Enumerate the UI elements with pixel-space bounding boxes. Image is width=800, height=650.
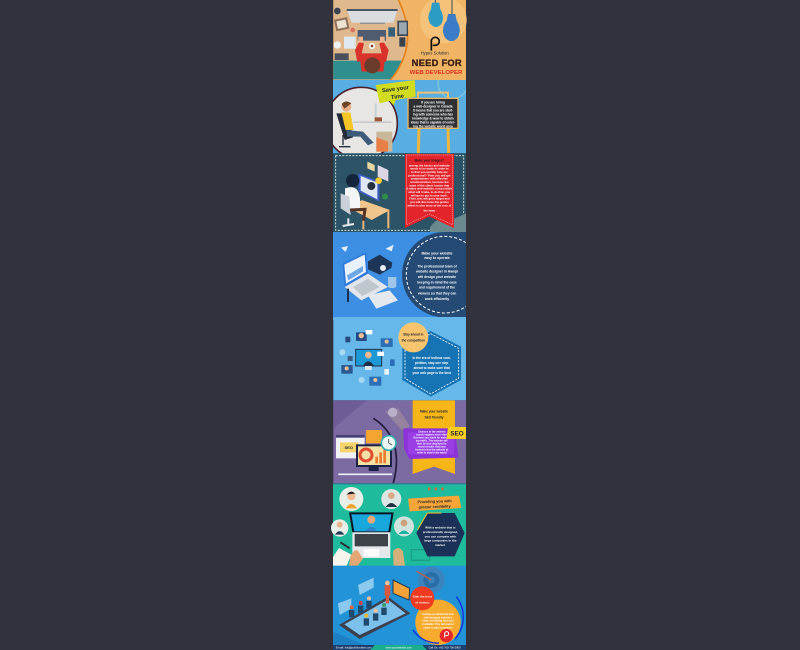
purple text panel <box>403 428 459 459</box>
callout: save your time: Save your <box>382 85 410 94</box>
footer bar: www.yourwebsite.com <box>386 646 413 650</box>
purple text panel: search engines more often <box>416 433 448 436</box>
circle text block: easier to gain customers <box>423 626 453 629</box>
circle text block: website designer in Hampi <box>415 270 458 274</box>
ribbon: you will also have the genius <box>410 200 449 204</box>
icon: target <box>416 567 445 593</box>
illustration: laptop with hands <box>333 512 405 566</box>
callout: save your time <box>376 80 416 105</box>
hexagon text block: market. <box>435 543 446 547</box>
yellow ribbon: Make your website <box>420 409 448 413</box>
purple text panel: then be also displayed in <box>417 442 447 445</box>
illustration: easel with blackboard: it means that you are start- <box>413 109 453 113</box>
banner: providing you: greater credibility <box>419 504 452 510</box>
panel: stay ahead in the competition <box>333 317 466 400</box>
circle text block: work efficiently <box>424 297 449 301</box>
circle text block: will design your website <box>417 275 456 279</box>
icon: rocket <box>385 408 410 430</box>
purple text panel: order to stay in the world <box>417 451 447 454</box>
icon: desk items <box>334 8 408 60</box>
circle text block: The professional team of <box>417 264 458 268</box>
purple text panel: ing traffic. The website will <box>416 439 448 442</box>
panel: save your time <box>333 80 466 155</box>
circle text block: Having a professional and <box>423 613 454 616</box>
ribbon: needs to be made in order to <box>410 167 449 171</box>
ribbon <box>405 154 454 228</box>
ribbon: the team <box>424 208 436 212</box>
illustration: easel with blackboard <box>408 93 458 153</box>
icon: network of computers <box>339 330 395 386</box>
callout: save your time: Time <box>391 94 404 101</box>
hexagon text block: large companies in the <box>424 539 457 543</box>
illustration: person at desk <box>333 86 398 154</box>
ribbon: communication, because the <box>410 180 449 184</box>
hexagon text block <box>402 331 461 397</box>
circle text block <box>402 232 466 317</box>
hexagon text block: ahead to make sure that <box>414 366 451 370</box>
icon: keyboard <box>358 30 386 41</box>
illustration: person at isometric desk <box>341 162 390 229</box>
icon: blue lamps <box>428 0 460 41</box>
illustration: SEO screens: SEO <box>344 445 353 450</box>
icon: monitor <box>347 9 398 24</box>
illustration: isometric laptop <box>341 245 398 309</box>
decoration: top icons <box>428 485 444 493</box>
circle text block: easy to operate <box>424 256 450 260</box>
ribbon: will get to put to your work. <box>410 193 448 197</box>
circle text block: keeping in mind the ease <box>417 280 457 284</box>
icon: red logo circle <box>440 629 453 642</box>
illustration: easel with blackboard: a web-designer in Canada <box>414 105 453 109</box>
hexagon text block <box>416 513 465 556</box>
illustration: easel with blackboard: knowledge & wow to obtain <box>412 117 454 121</box>
callout: stay ahead: Stay ahead in <box>403 333 424 337</box>
callout: stay ahead <box>398 322 428 352</box>
illustration: easel with blackboard: ing with someone who has <box>413 113 453 117</box>
hexagon text block: your web page is the best <box>412 371 452 375</box>
panel: gain the trust of visitors <box>333 566 466 650</box>
badge: SEO: SEO <box>450 430 464 437</box>
blue arcs <box>413 597 463 643</box>
yellow ribbon: SEO friendly <box>425 415 444 419</box>
heading: web developer: WEB DEVELOPER <box>410 70 462 76</box>
illustration: easel with blackboard: If you are hiring <box>421 101 445 105</box>
circle text block: viewers so that they can <box>418 291 456 295</box>
hexagon text block: petition, stay one step <box>415 361 448 365</box>
circle text block: well-designed website it <box>424 616 452 619</box>
banner: providing you <box>408 496 461 511</box>
circle text block: and requirement of the <box>419 286 455 290</box>
callout: gain the trust: Gain the trust <box>413 595 432 599</box>
banner: providing you: Providing you with <box>417 499 452 504</box>
icon: people in circles <box>331 487 414 537</box>
footer bar: Call Us: +91-700-700-0000 <box>429 646 461 650</box>
panel: header <box>333 0 467 80</box>
ribbon: programmers with effective <box>411 177 448 181</box>
ribbon: to that you quickly help are <box>411 170 448 174</box>
hexagon text block: In the era of tedious com- <box>412 356 451 360</box>
subtitle: Hypes Solution <box>421 50 449 55</box>
purple text panel: search results that your <box>418 445 446 448</box>
heading: need for: NEED FOR <box>412 58 462 68</box>
purple text panel: Chances of the website <box>418 430 446 433</box>
ribbon: what will it take, to do that, you <box>407 190 451 194</box>
ribbon: professional? Then you will get <box>408 173 451 177</box>
ribbon: team of the client, knows that <box>410 183 449 187</box>
illustration: easel with blackboard: ideas that is capable of enter- <box>411 121 455 125</box>
callout: gain the trust <box>410 586 434 610</box>
purple text panel: Business are made for website <box>413 436 451 439</box>
panel: make your website easy to operate <box>333 232 466 320</box>
callout: stay ahead: the competition <box>402 338 425 342</box>
ribbon: Then, you will get a target and <box>409 197 450 201</box>
hexagon text block: With a website that is <box>425 526 456 530</box>
yellow ribbon <box>413 400 455 474</box>
circle text block: Make your website <box>422 252 453 256</box>
purple text panel: business has the website at <box>415 448 448 451</box>
illustration: phone with audience <box>338 578 410 639</box>
illustration: easel with blackboard: ing the website world area <box>413 124 453 128</box>
panel: make your website SEO friendly <box>333 400 466 483</box>
footer bar: E-mail: info@publicmaker.com <box>336 646 372 650</box>
circle text block: credibility. This will make it <box>422 623 454 626</box>
hexagon text block: professionally designed, <box>423 530 458 534</box>
circle text block <box>415 600 461 645</box>
ribbon: among the basics and website <box>409 163 450 167</box>
ribbon: it takes web website, not possible <box>407 187 452 191</box>
panel: teal section with red ribbon <box>333 153 466 232</box>
ribbon: Make your images? <box>415 158 444 162</box>
panel: providing greater credibility <box>331 483 466 568</box>
hexagon text block: you can compete with <box>425 534 456 538</box>
callout: gain the trust: of visitors <box>415 600 430 604</box>
ribbon: which is also more at the core of <box>406 203 451 207</box>
circle text block: helps in building trust and <box>422 620 454 623</box>
icon: logo P <box>431 37 439 51</box>
icon: person at desk <box>355 37 389 73</box>
footer bar <box>333 645 466 650</box>
